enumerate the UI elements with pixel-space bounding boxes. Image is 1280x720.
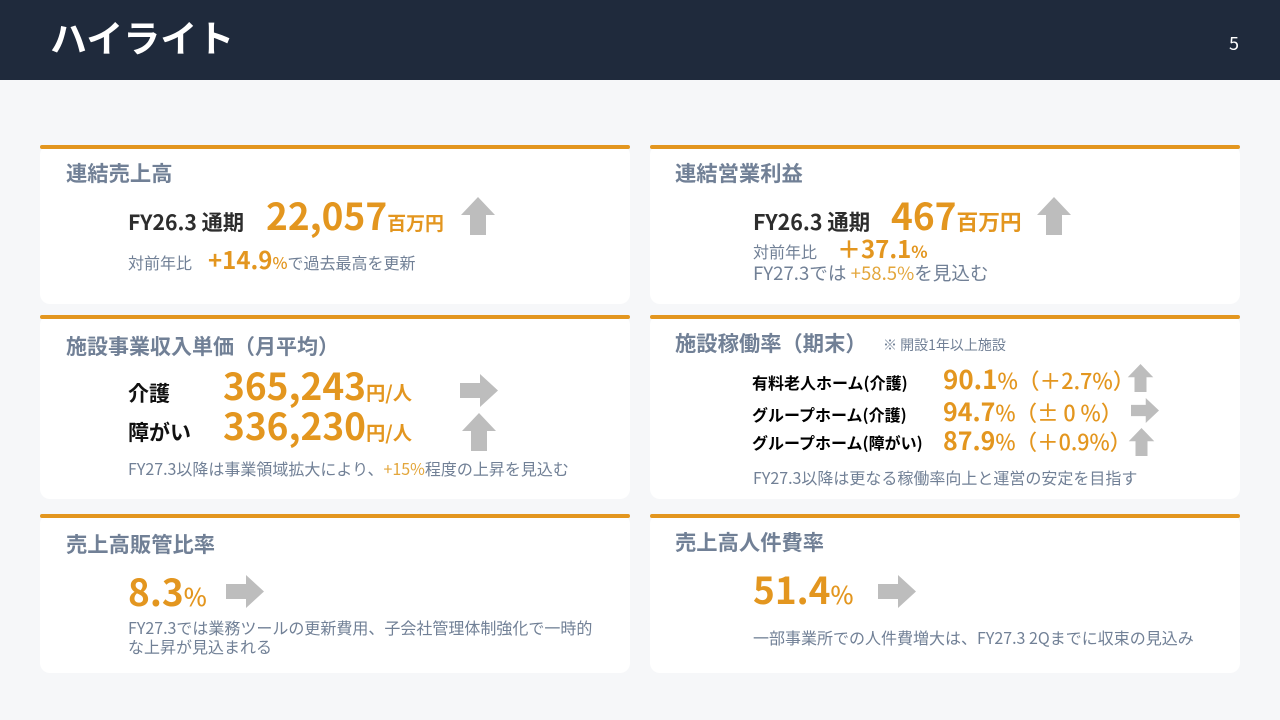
note: ※ 開設1年以上施設 — [883, 335, 1006, 355]
row label 1: 有料老人ホーム(介護) — [752, 370, 908, 394]
page number: 5 — [1229, 30, 1239, 56]
row value 2: 94.7%（± 0 %） — [943, 393, 1122, 429]
heading: 施設稼働率（期末） — [675, 327, 867, 358]
icon: up arrow — [461, 197, 495, 235]
label: disability: 障がい — [128, 417, 191, 447]
year on year value: +14.9%で過去最高を更新 — [208, 241, 416, 276]
period label: FY26.3 通期 — [753, 206, 870, 237]
year on year text: 対前年比 — [753, 239, 817, 263]
forecast text: FY27.3では +58.5%を見込む — [753, 259, 989, 286]
icon: right arrow — [460, 374, 498, 407]
forecast text: FY27.3以降は事業領域拡大により、+15%程度の上昇を見込む — [128, 456, 569, 480]
icon: right arrow — [1131, 398, 1159, 423]
year on year text: 対前年比 — [128, 250, 192, 274]
icon: up arrow — [1037, 197, 1071, 235]
row value 1: 90.1%（＋2.7%） — [943, 360, 1134, 397]
panel: personnel cost ratio — [650, 514, 1240, 673]
heading: 連結営業利益 — [675, 157, 803, 188]
icon: up arrow — [1129, 428, 1154, 456]
value: 22,057百万円 — [266, 187, 444, 241]
value: disability: 336,230円/人 — [223, 397, 412, 451]
description: FY27.3では業務ツールの更新費用、子会社管理体制強化で一時的 — [128, 615, 592, 639]
header band — [0, 0, 1280, 80]
panel: consolidated operating profit — [650, 145, 1240, 304]
row label 2: グループホーム(介護) — [752, 402, 907, 426]
value: care: 365,243円/人 — [223, 357, 412, 411]
title: ハイライト — [50, 9, 234, 63]
icon: right arrow — [226, 575, 264, 608]
icon: right arrow — [878, 575, 916, 608]
description: 一部事業所での人件費増大は、FY27.3 2Qまでに収束の見込み — [753, 625, 1194, 649]
panel: SG&A ratio — [40, 514, 630, 673]
heading: 売上高人件費率 — [675, 526, 824, 557]
row value 3: 87.9%（＋0.9%） — [943, 422, 1131, 458]
heading: 施設事業収入単価（月平均） — [66, 331, 339, 361]
forecast text: FY27.3以降は更なる稼働率向上と運営の安定を目指す — [753, 465, 1137, 489]
period label: FY26.3 通期 — [128, 206, 244, 237]
description — [128, 615, 592, 658]
icon: up arrow — [1128, 364, 1153, 392]
value: 8.3% — [128, 563, 207, 617]
icon: up arrow — [462, 413, 496, 451]
label: care: 介護 — [128, 378, 170, 408]
panel: facility occupancy — [650, 315, 1240, 499]
year on year value: ＋37.1% — [837, 230, 928, 265]
heading: 売上高販管比率 — [66, 528, 215, 559]
value: 51.4% — [753, 561, 854, 615]
panel: consolidated sales — [40, 145, 630, 304]
value: 467百万円 — [891, 187, 1022, 241]
panel: facility revenue per unit — [40, 315, 630, 499]
description: な上昇が見込まれる — [128, 634, 272, 658]
heading: 連結売上高 — [66, 157, 172, 188]
row label 3: グループホーム(障がい) — [752, 430, 923, 454]
